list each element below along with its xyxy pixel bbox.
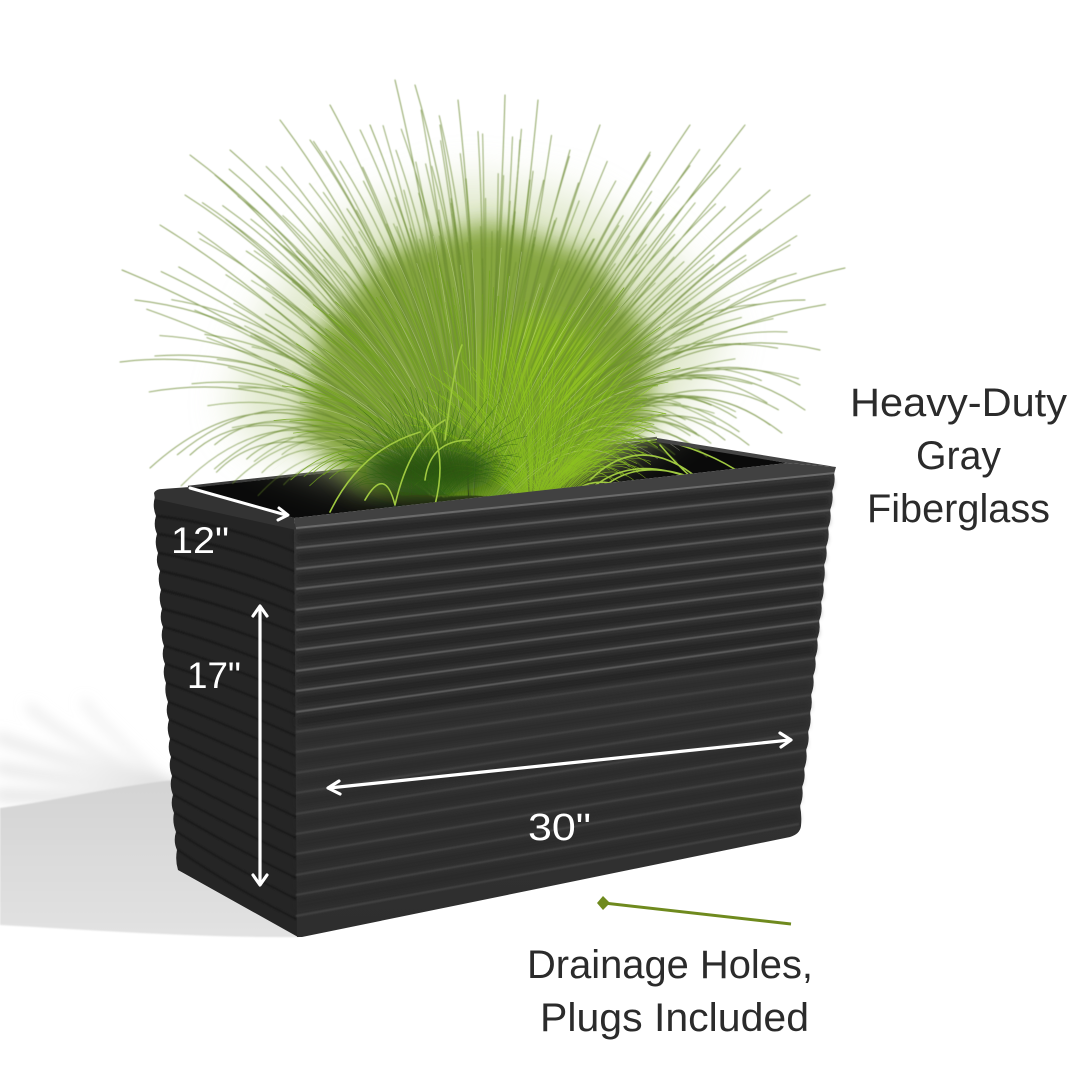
callout: material: Fiberglass bbox=[867, 487, 1050, 531]
ornamental grass bbox=[120, 80, 845, 515]
grass arching strands bbox=[330, 345, 765, 512]
callout: material: Heavy-Duty bbox=[850, 381, 1067, 425]
planter interior opening bbox=[188, 438, 787, 518]
grass bright core blades bbox=[404, 346, 665, 502]
label: 12 inches: 12" bbox=[171, 520, 229, 561]
planter side face bbox=[154, 492, 298, 937]
planter front face bbox=[294, 473, 835, 937]
grass mid blades bbox=[190, 158, 776, 515]
leader line to drainage holes bbox=[597, 896, 791, 924]
callout: drainage holes: Plugs Included bbox=[540, 996, 809, 1040]
grass outer wisps bbox=[120, 80, 845, 513]
planter body bbox=[154, 438, 836, 937]
label: 17 inches: 17" bbox=[187, 655, 241, 696]
arrow: 12 inch depth bbox=[190, 488, 288, 520]
callout: drainage holes: Drainage Holes, bbox=[527, 943, 813, 987]
callout: material bbox=[850, 381, 1067, 531]
grass pale gaps between blades bbox=[253, 230, 712, 504]
callout: material: Gray bbox=[916, 434, 1001, 478]
arrow: 17 inch height bbox=[253, 606, 267, 885]
planter rim bbox=[154, 438, 836, 530]
grass soft foliage mass bbox=[230, 180, 725, 490]
ground shadow bbox=[0, 703, 300, 937]
label: 30 inches: 30" bbox=[528, 807, 591, 849]
arrow: 30 inch length bbox=[328, 733, 791, 794]
grass inner blades bbox=[274, 263, 680, 504]
grass dark base bbox=[336, 387, 528, 499]
callout: drainage holes bbox=[527, 943, 813, 1040]
